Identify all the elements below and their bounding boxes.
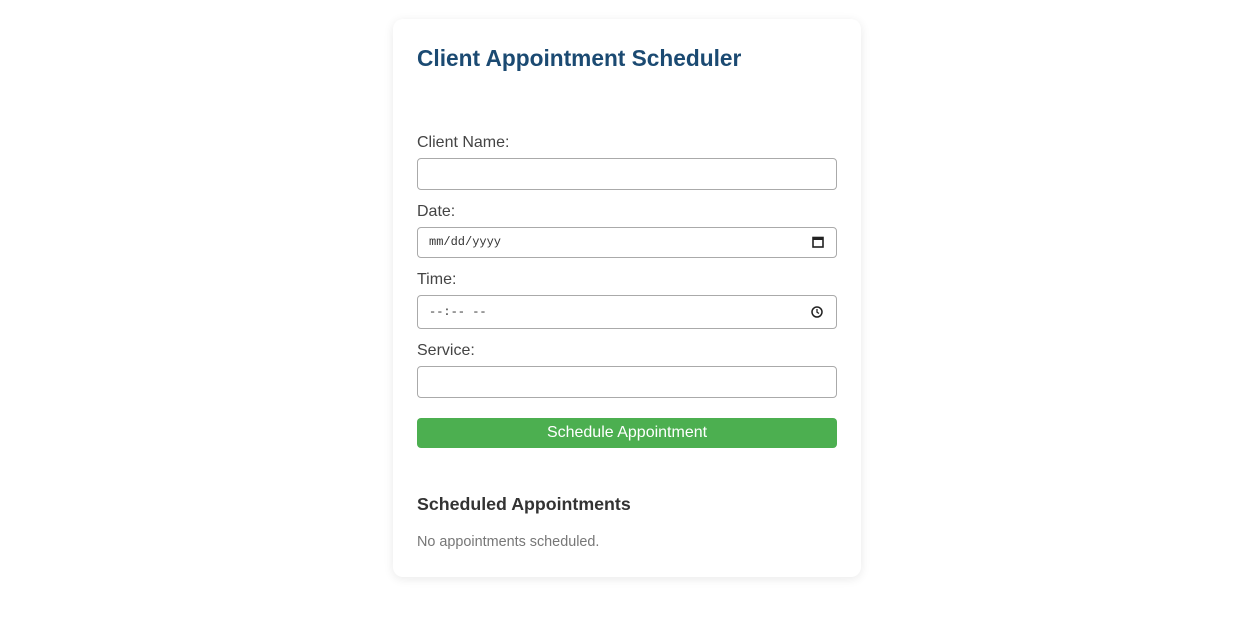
label: date: Date: [417, 203, 455, 220]
label: client name: Client Name: [417, 134, 509, 151]
panel: scheduler card [393, 19, 861, 577]
icon: clock [811, 306, 823, 318]
input: date: mm/dd/yyyy [429, 235, 501, 249]
input: time: --:-- -- [429, 305, 487, 319]
input: date [417, 227, 837, 258]
input: service [417, 366, 837, 398]
button: schedule appointment [417, 418, 837, 448]
button: schedule appointment: Schedule Appointment [547, 424, 707, 441]
label: time: Time: [417, 271, 456, 288]
label: service: Service: [417, 342, 475, 359]
text: empty state: No appointments scheduled. [417, 534, 599, 550]
input: client name [417, 158, 837, 190]
title: Client Appointment Scheduler [417, 45, 741, 71]
input: time [417, 295, 837, 329]
icon: calendar [812, 236, 824, 248]
heading: scheduled appointments: Scheduled Appointments [417, 494, 631, 514]
